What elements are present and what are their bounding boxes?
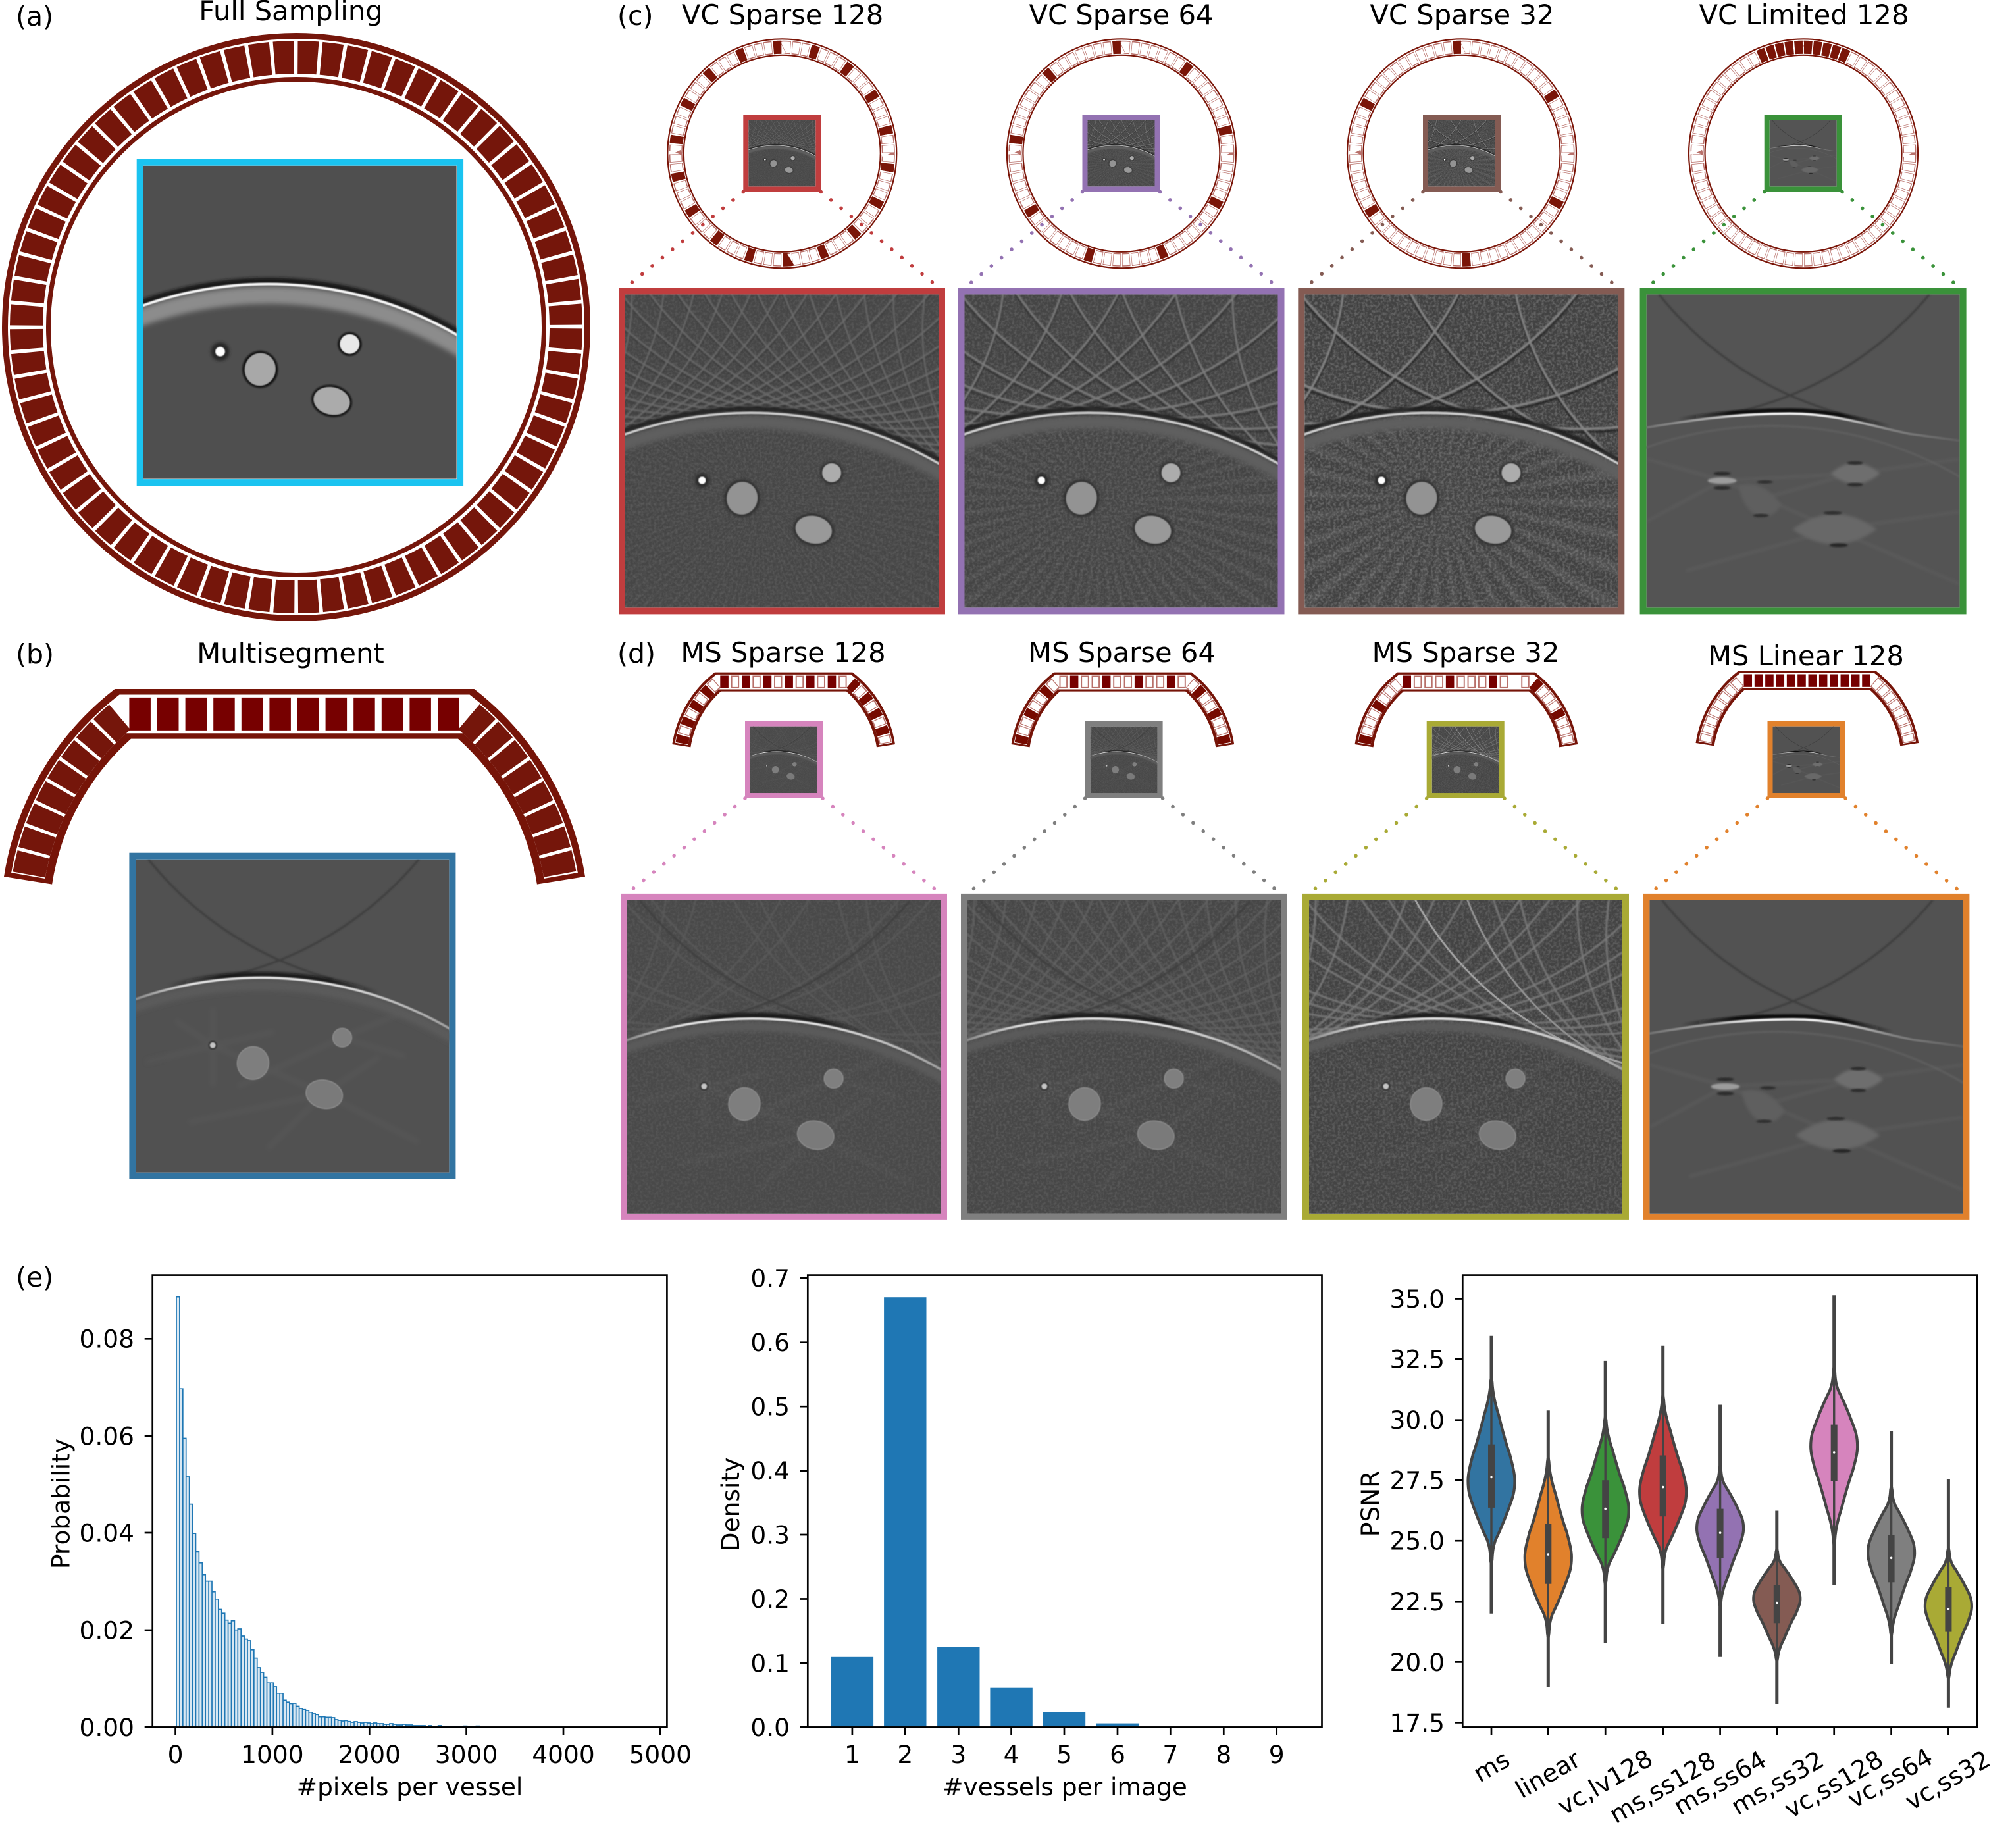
x tick labels, rotated: ms bbox=[1468, 1745, 1514, 1788]
ring icon with every 4th element active bbox=[667, 39, 896, 268]
multisegment array bbox=[0, 542, 675, 1303]
thumbnail bbox=[996, 596, 1259, 796]
x tick labels, rotated: vc,ss128 bbox=[1779, 1745, 1888, 1824]
full sampling image with cyan frame bbox=[130, 163, 470, 482]
x tick labels: 1000 bbox=[241, 1740, 304, 1769]
x tick labels: 0 bbox=[168, 1740, 184, 1769]
x tick labels bbox=[844, 1740, 1285, 1769]
heading: MS Linear 128 bbox=[1708, 640, 1904, 672]
x tick labels, rotated: ms,ss32 bbox=[1726, 1745, 1829, 1821]
thumbnail bbox=[1770, 724, 1843, 796]
x axis label: #vessels per image bbox=[942, 1772, 1187, 1801]
column: MS Linear 128 bbox=[1636, 615, 1976, 1217]
x tick labels: 5000 bbox=[629, 1740, 692, 1769]
y tick labels: 0.04 bbox=[79, 1519, 134, 1548]
x tick labels: 6 bbox=[1110, 1740, 1125, 1769]
x tick labels, rotated bbox=[1468, 1743, 1995, 1830]
x tick labels: 4000 bbox=[532, 1740, 595, 1769]
y axis label: PSNR bbox=[1356, 1471, 1385, 1537]
y tick labels: 22.5 bbox=[1390, 1587, 1445, 1616]
y axis label: Probability bbox=[46, 1439, 75, 1569]
zoom connector dotted lines bbox=[965, 192, 1278, 288]
thumbnail bbox=[994, 0, 1256, 197]
x tick labels: 8 bbox=[1216, 1740, 1231, 1769]
heading: MS Sparse 64 bbox=[1028, 636, 1216, 669]
multisegment icon, every 4th element active bbox=[1320, 616, 1612, 908]
violin: ms bbox=[1468, 1336, 1515, 1614]
zoom connector dotted lines bbox=[1647, 192, 1960, 288]
x tick labels: 4 bbox=[1004, 1740, 1019, 1769]
y tick labels: 0.2 bbox=[750, 1585, 790, 1614]
x tick labels, rotated: vc,ss32 bbox=[1900, 1745, 1995, 1816]
y tick labels: 25.0 bbox=[1390, 1527, 1445, 1556]
panel label e: (e) bbox=[16, 1262, 53, 1293]
x tick labels: 7 bbox=[1162, 1740, 1178, 1769]
panel label a: (a) bbox=[16, 1, 53, 32]
y tick labels: 0.4 bbox=[750, 1456, 790, 1485]
reconstruction image bbox=[1634, 291, 1973, 611]
x tick labels, rotated: ms,ss64 bbox=[1668, 1745, 1771, 1821]
panel (d): multisegment sampling bbox=[188, 292, 2010, 1217]
y tick labels: 0.6 bbox=[750, 1328, 790, 1357]
heading: MS Sparse 128 bbox=[681, 636, 886, 669]
multisegment image with blue frame bbox=[122, 856, 462, 1176]
violin: vc,ss32 bbox=[1925, 1479, 1972, 1708]
panel label b: (b) bbox=[16, 638, 54, 670]
zoom connector dotted lines bbox=[1304, 192, 1618, 288]
column: MS Sparse 32 bbox=[870, 293, 2010, 1217]
bars bbox=[831, 1297, 1139, 1727]
multisegment icon, every 2nd element active bbox=[638, 616, 929, 908]
panel (a): full sampling bbox=[5, 0, 587, 619]
heading: MS Sparse 32 bbox=[1372, 636, 1559, 669]
zoom connector dotted lines bbox=[625, 192, 939, 288]
zoom connector dotted lines bbox=[1309, 798, 1622, 894]
reconstruction image bbox=[865, 0, 2010, 656]
thumbnail bbox=[654, 0, 917, 197]
violin: vc,ss128 bbox=[1811, 1295, 1857, 1585]
y tick labels: 32.5 bbox=[1390, 1345, 1445, 1374]
x tick labels: 5 bbox=[1056, 1740, 1072, 1769]
y tick labels: 0.7 bbox=[750, 1264, 790, 1293]
reconstruction image bbox=[188, 292, 1415, 1217]
zoom connector dotted lines bbox=[627, 798, 941, 894]
y tick labels: 27.5 bbox=[1390, 1466, 1445, 1495]
y tick labels: 0.02 bbox=[79, 1616, 134, 1645]
reconstruction image bbox=[528, 292, 1755, 1217]
y tick labels: 0.3 bbox=[750, 1520, 790, 1549]
bar chart: vessels per image bbox=[716, 1264, 1322, 1801]
histogram: pixels per vessel bbox=[46, 1275, 692, 1801]
y tick labels: 17.5 bbox=[1390, 1708, 1445, 1737]
column: MS Sparse 64 bbox=[528, 292, 1755, 1217]
axes frame and ticks bbox=[145, 1275, 667, 1735]
y tick labels bbox=[79, 1324, 134, 1742]
y tick labels: 0.0 bbox=[750, 1713, 790, 1742]
ring icon with top elements active bbox=[1662, 13, 1944, 294]
panel (b): multisegment bbox=[0, 542, 675, 1303]
x tick labels: 3 bbox=[950, 1740, 966, 1769]
y tick labels: 0.5 bbox=[750, 1393, 790, 1422]
y tick labels: 0.06 bbox=[79, 1422, 134, 1450]
ring icon with every 12th element active bbox=[1347, 39, 1576, 268]
x tick labels: 9 bbox=[1269, 1740, 1285, 1769]
zoom connector dotted lines bbox=[967, 798, 1281, 894]
y tick labels: 20.0 bbox=[1390, 1648, 1445, 1677]
x tick labels: 3000 bbox=[435, 1740, 498, 1769]
column: VC Sparse 64 bbox=[525, 0, 1751, 656]
violin plot: PSNR bbox=[1356, 1275, 1995, 1830]
multisegment icon, every 3rd element active bbox=[976, 615, 1269, 908]
thumbnail bbox=[1766, 118, 1840, 189]
violin: ms,ss32 bbox=[1753, 1511, 1800, 1704]
full ring transducer array bbox=[5, 36, 587, 619]
heading: Multisegment: Multisegment bbox=[197, 637, 384, 669]
reconstruction image bbox=[1636, 897, 1976, 1217]
y tick labels bbox=[750, 1264, 790, 1742]
x axis label: #pixels per vessel bbox=[297, 1772, 523, 1801]
y tick labels: 0.00 bbox=[79, 1713, 134, 1742]
thumbnail bbox=[1338, 597, 1601, 796]
x tick labels bbox=[168, 1740, 692, 1769]
zoom connector dotted lines bbox=[1649, 798, 1963, 894]
column: VC Limited 128 bbox=[1634, 0, 1973, 611]
histogram bars bbox=[176, 1297, 479, 1727]
x tick labels, rotated: linear bbox=[1510, 1744, 1585, 1805]
ring icon with every 8th element active bbox=[1007, 39, 1236, 268]
y tick labels: 35.0 bbox=[1390, 1285, 1445, 1314]
multisegment icon, flat segment active bbox=[1661, 615, 1953, 907]
violin: ms,ss128 bbox=[1639, 1346, 1686, 1624]
x tick labels: 2 bbox=[897, 1740, 913, 1769]
panel (c): virtual circular array sampling bbox=[186, 0, 2010, 656]
y tick labels: 0.1 bbox=[750, 1649, 790, 1678]
x tick labels, rotated: vc,ss64 bbox=[1842, 1743, 1938, 1814]
x tick labels, rotated: vc,lv128 bbox=[1553, 1743, 1657, 1821]
column: MS Sparse 128 bbox=[188, 292, 1415, 1217]
x tick labels: 2000 bbox=[338, 1740, 401, 1769]
reconstruction image bbox=[525, 0, 1751, 656]
x tick labels, rotated: ms,ss128 bbox=[1605, 1745, 1720, 1830]
violin: vc,lv128 bbox=[1582, 1361, 1629, 1643]
y tick labels bbox=[1390, 1285, 1445, 1737]
violin: vc,ss64 bbox=[1868, 1431, 1915, 1664]
y tick labels: 30.0 bbox=[1390, 1406, 1445, 1435]
thumbnail bbox=[656, 596, 919, 796]
violin: linear bbox=[1525, 1410, 1572, 1687]
y axis label: Density bbox=[716, 1458, 745, 1551]
panel label c: (c) bbox=[617, 0, 654, 32]
thumbnail bbox=[1334, 0, 1597, 197]
panel label d: (d) bbox=[617, 638, 656, 669]
axes frame and ticks bbox=[800, 1275, 1322, 1735]
reconstruction image bbox=[186, 0, 1413, 656]
y tick labels: 0.08 bbox=[79, 1324, 134, 1353]
x tick labels: 1 bbox=[844, 1740, 860, 1769]
column: VC Sparse 128 bbox=[186, 0, 1413, 656]
column: VC Sparse 32 bbox=[865, 0, 2010, 656]
reconstruction image bbox=[870, 293, 2010, 1217]
axes frame and ticks bbox=[1455, 1275, 1977, 1735]
violin: ms,ss64 bbox=[1697, 1404, 1743, 1657]
